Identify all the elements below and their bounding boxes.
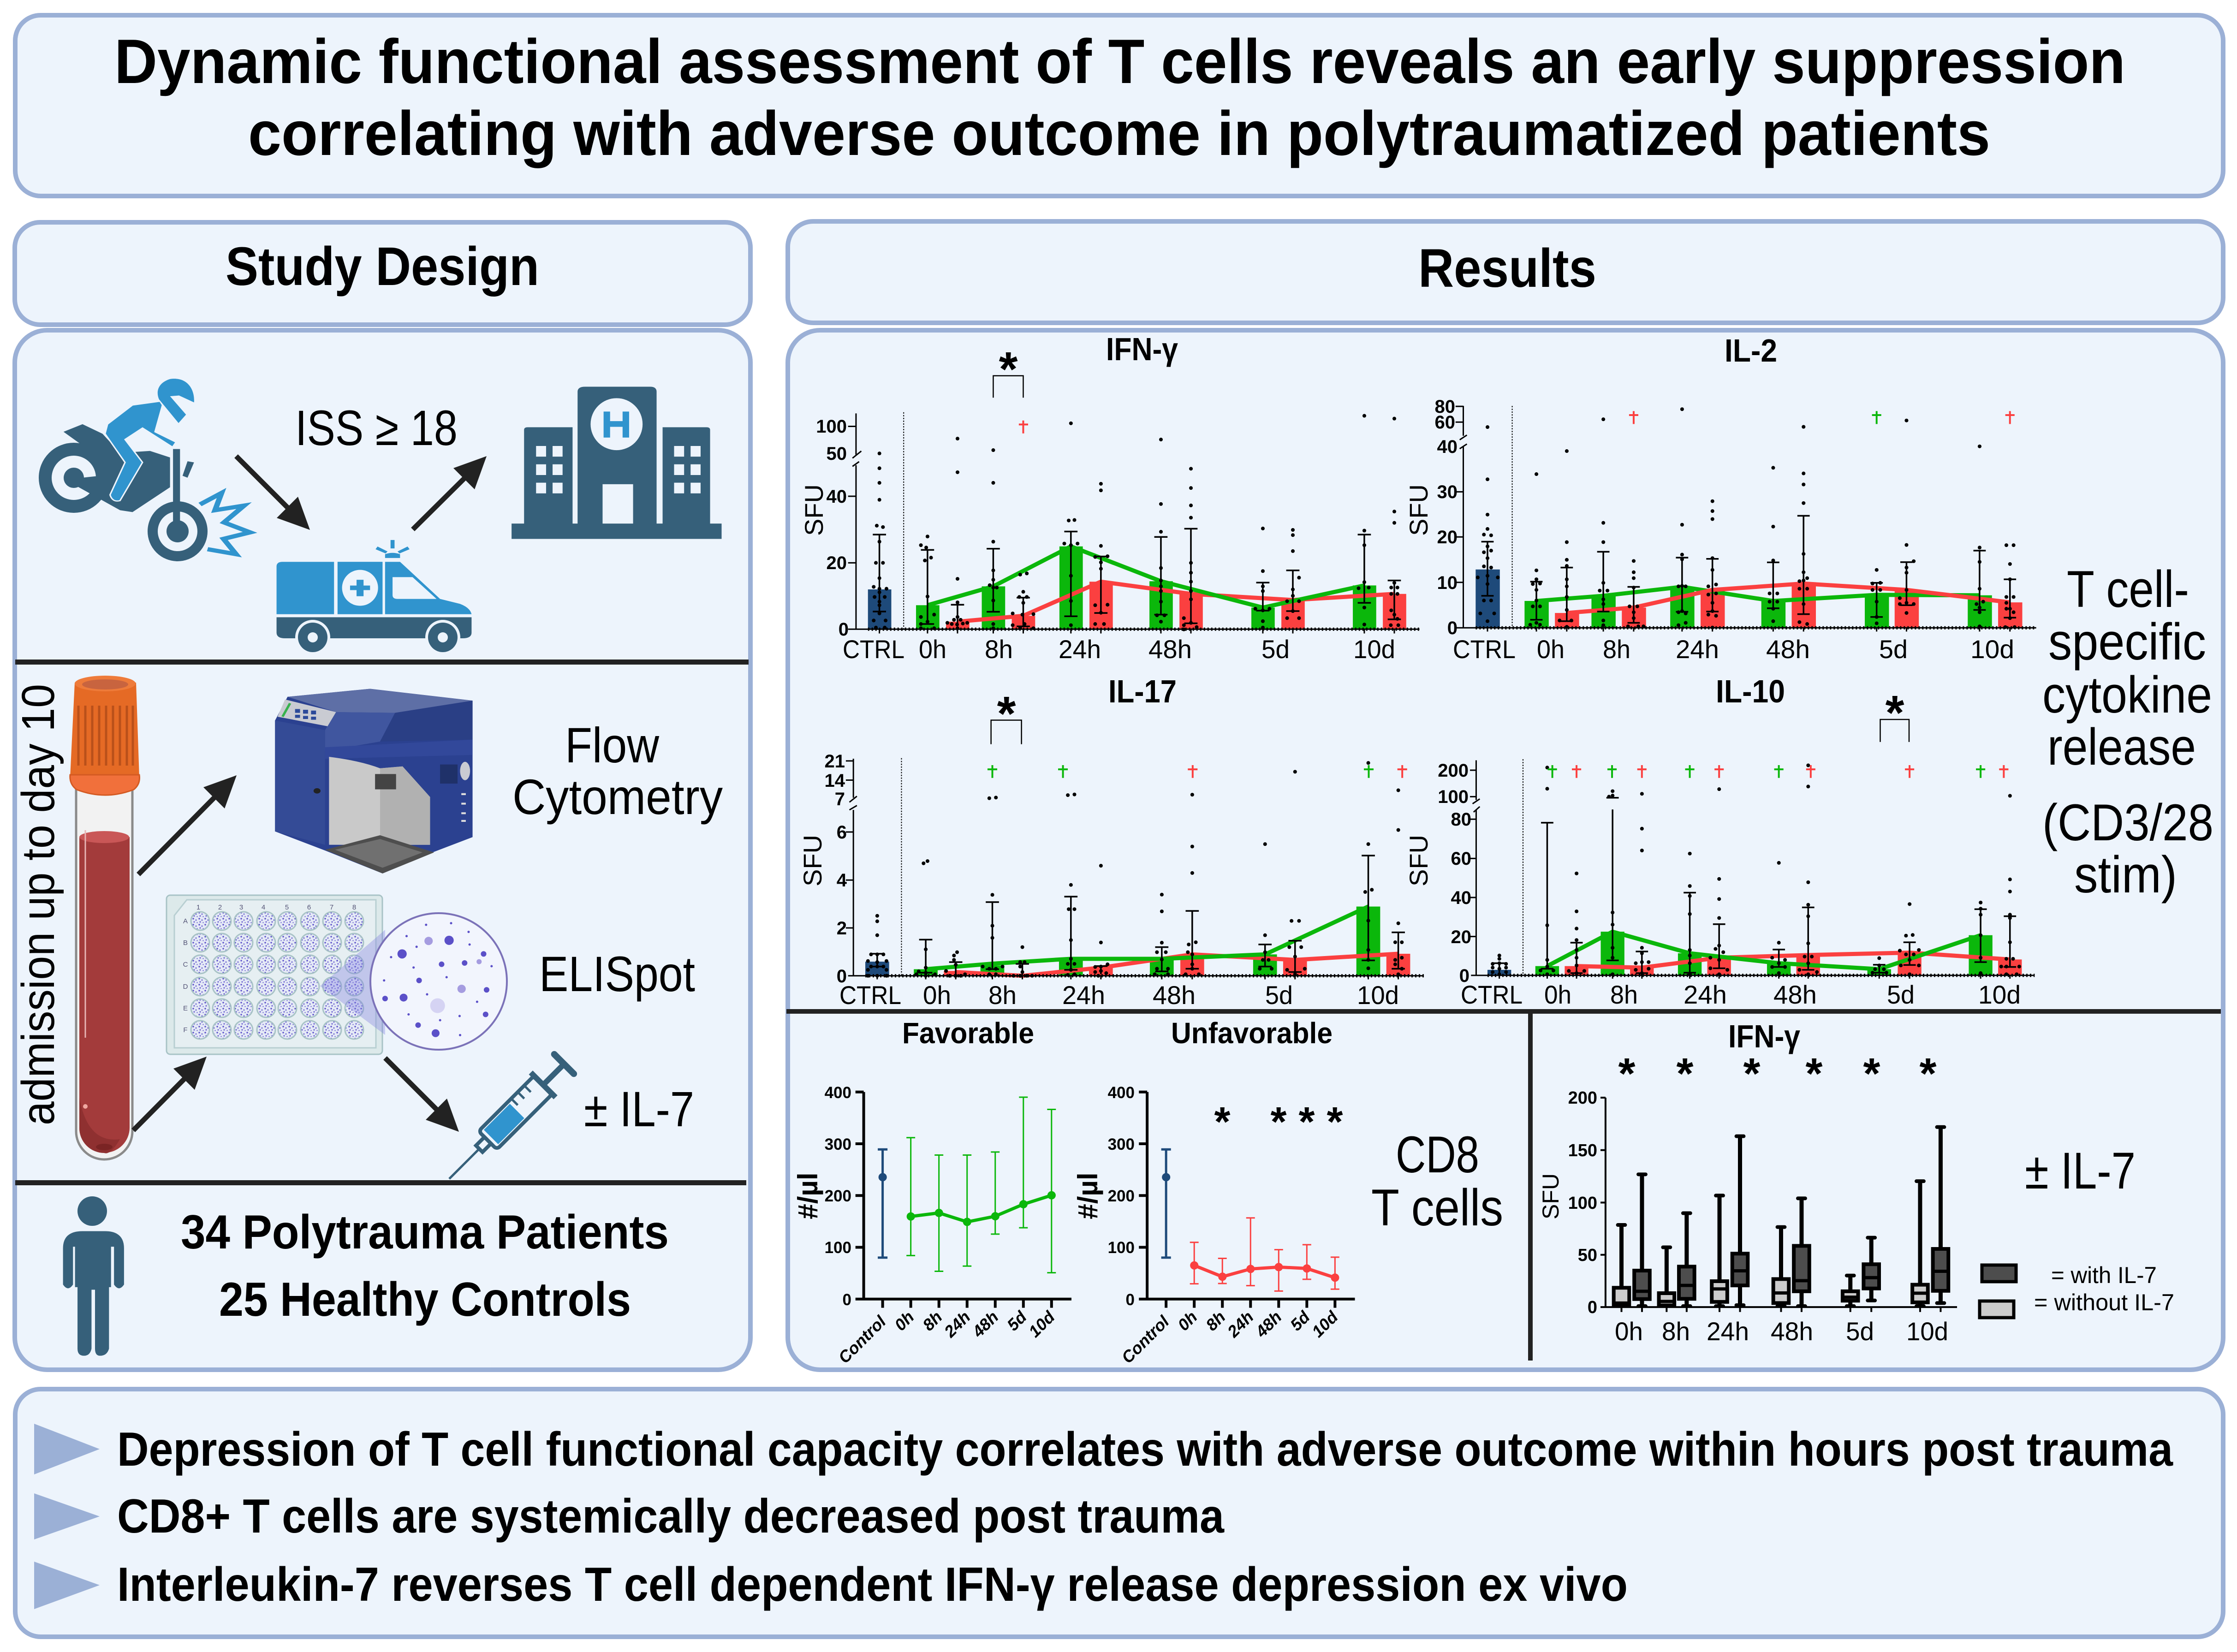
panel: title bbox=[15, 15, 2223, 196]
x axis labels: 5d bbox=[1846, 1317, 1874, 1346]
y axis tick labels bbox=[1568, 1088, 1597, 1317]
y axis tick labels: 400 bbox=[825, 1084, 851, 1102]
y axis tick labels: 40 bbox=[827, 487, 847, 507]
y axis tick labels bbox=[825, 1084, 851, 1309]
y axis tick labels bbox=[825, 751, 847, 986]
text: cytokine release side label bbox=[2042, 560, 2213, 903]
y axis tick labels: 50 bbox=[1578, 1246, 1597, 1265]
x axis labels: 5d bbox=[1887, 980, 1915, 1009]
x axis labels: 0h bbox=[891, 1307, 918, 1334]
icon: ELISpot well plate: 1 bbox=[196, 903, 200, 911]
conclusion text: CD8+ T cells are systemically decreased post trauma bbox=[117, 1490, 1225, 1543]
x axis labels bbox=[1453, 635, 2014, 664]
chart: IFN-gamma box plots with and without IL-7 bbox=[1538, 1018, 1957, 1346]
x axis labels: 8h bbox=[1662, 1317, 1690, 1346]
x axis labels: 48h bbox=[1771, 1317, 1813, 1346]
icon: ELISpot well plate: C bbox=[183, 961, 188, 969]
text: cohort sizes bbox=[181, 1206, 669, 1326]
significance asterisk: * bbox=[999, 342, 1018, 396]
text: cytokine release side label: release bbox=[2047, 718, 2196, 776]
x axis labels: 10d bbox=[1308, 1307, 1342, 1341]
icon: ELISpot well plate: 5 bbox=[285, 903, 289, 911]
y axis tick labels: 0 bbox=[837, 966, 847, 986]
x axis labels: 8h bbox=[1202, 1307, 1229, 1334]
x axis labels: 10d bbox=[1357, 981, 1399, 1010]
x axis labels: 5d bbox=[1286, 1307, 1314, 1334]
icon: ELISpot well plate: 6 bbox=[307, 903, 311, 911]
y axis tick labels: 80 bbox=[1434, 397, 1455, 417]
x axis labels: 48h bbox=[1148, 635, 1192, 664]
x axis labels: 0h bbox=[923, 981, 951, 1010]
plot: points, line and error bars bbox=[1139, 1092, 1355, 1308]
x axis labels: Control bbox=[834, 1312, 890, 1367]
arrow: plate to syringe bbox=[385, 1058, 459, 1132]
conclusion text bbox=[117, 1423, 2173, 1611]
x axis labels bbox=[834, 1307, 1059, 1367]
chart title: Favorable bbox=[902, 1016, 1034, 1050]
y axis tick labels: 100 bbox=[1568, 1194, 1597, 1213]
text: cytokine release side label: stim) bbox=[2074, 846, 2177, 903]
significance asterisks: * bbox=[1743, 1049, 1761, 1098]
y axis tick labels: 100 bbox=[1438, 787, 1469, 807]
chart: CD8 T cells favorable bbox=[792, 1016, 1071, 1367]
text: injury severity score: ISS ≥ 18 bbox=[295, 400, 458, 456]
y axis tick labels: 150 bbox=[1568, 1141, 1597, 1160]
y axis tick labels: 2 bbox=[837, 918, 847, 939]
panel: key conclusions bbox=[15, 1389, 2223, 1637]
y axis tick labels bbox=[816, 416, 849, 640]
significance asterisk: * bbox=[997, 687, 1016, 741]
icon: motorcycle crash bbox=[45, 379, 250, 556]
icon: syringe bbox=[437, 1052, 577, 1191]
x axis labels: 0h bbox=[1537, 635, 1565, 664]
y axis tick labels: 0 bbox=[1447, 618, 1458, 638]
arrow: tube to flow cytometer bbox=[138, 775, 237, 874]
chart: IL-2 cytokine release bbox=[1404, 333, 2036, 664]
text: cohort sizes: 34 Polytrauma Patients bbox=[181, 1206, 669, 1259]
icon: hospital bbox=[512, 386, 722, 539]
x axis labels: 0h bbox=[1174, 1307, 1201, 1334]
y axis tick labels bbox=[1438, 761, 1471, 986]
y axis tick labels: 0 bbox=[1459, 966, 1470, 986]
x axis labels: 48h bbox=[1773, 980, 1817, 1009]
x axis labels: 48h bbox=[1153, 981, 1196, 1010]
x axis labels: 24h bbox=[1684, 980, 1727, 1009]
heading: results: Results bbox=[1418, 238, 1596, 299]
arrow: ambulance to hospital bbox=[413, 456, 487, 529]
text: CD8 T cells side label: CD8 bbox=[1396, 1126, 1479, 1183]
chart title: Unfavorable bbox=[1171, 1016, 1333, 1050]
chart: IFN-gamma cytokine release bbox=[799, 331, 1420, 664]
y axis tick labels: 10 bbox=[1437, 573, 1458, 593]
y axis tick labels: 20 bbox=[1451, 927, 1471, 947]
x axis labels: CTRL bbox=[1453, 635, 1516, 664]
x axis labels bbox=[1461, 980, 2021, 1009]
y axis tick labels: 300 bbox=[1108, 1135, 1135, 1153]
y axis tick labels: 50 bbox=[827, 444, 847, 464]
plot: box and whisker marks bbox=[1600, 1098, 1957, 1312]
icon: magnified well with spots bbox=[320, 913, 507, 1050]
significance asterisks: * bbox=[1677, 1049, 1694, 1098]
text: CD8 T cells side label bbox=[1371, 1126, 1503, 1236]
chart: IL-10 cytokine release bbox=[1404, 673, 2035, 1009]
icon: ELISpot well plate: F bbox=[183, 1026, 188, 1034]
y axis tick labels: 200 bbox=[1108, 1187, 1135, 1205]
text: flow cytometry: Cytometry bbox=[512, 769, 723, 825]
x axis labels: 10d bbox=[1353, 635, 1395, 664]
y axis tick labels: 200 bbox=[825, 1187, 851, 1205]
chart: CD8 T cells unfavorable bbox=[1072, 1016, 1355, 1367]
x axis labels bbox=[843, 635, 1395, 664]
y axis tick labels: 0 bbox=[843, 1291, 851, 1309]
significance asterisks bbox=[1214, 1099, 1343, 1145]
y axis tick labels: 0 bbox=[839, 619, 849, 640]
y axis tick labels: 40 bbox=[1451, 888, 1471, 908]
y axis tick labels: 21 bbox=[825, 751, 845, 772]
x axis labels: CTRL bbox=[843, 635, 904, 664]
x axis labels: 24h bbox=[1707, 1317, 1749, 1346]
y axis label: SFU bbox=[799, 484, 828, 536]
chart: IL-17 cytokine release bbox=[798, 673, 1424, 1010]
x axis labels: 10d bbox=[1906, 1317, 1948, 1346]
x axis labels: 24h bbox=[1059, 635, 1101, 664]
y axis label: SFU bbox=[1538, 1173, 1564, 1219]
plot: bars, lines, error bars and dots bbox=[1456, 406, 2036, 631]
x axis labels: 8h bbox=[1603, 635, 1630, 664]
y axis tick labels: 300 bbox=[825, 1135, 851, 1153]
y axis label: SFU bbox=[1404, 835, 1433, 886]
legend: with and without IL-7 bbox=[1980, 1262, 2174, 1318]
x axis labels: 5d bbox=[1879, 635, 1908, 664]
x axis labels: 10d bbox=[1025, 1307, 1059, 1341]
heading: study design: Study Design bbox=[226, 236, 539, 297]
text: cytokine release side label: cytokine bbox=[2042, 666, 2212, 724]
plot: points, line and error bars bbox=[856, 1092, 1071, 1308]
y axis tick labels: 30 bbox=[1437, 482, 1458, 502]
x axis labels bbox=[1615, 1317, 1948, 1346]
text: cohort sizes: 25 Healthy Controls bbox=[219, 1273, 631, 1326]
y axis tick labels: 7 bbox=[835, 789, 845, 809]
icon: ELISpot well plate: A bbox=[183, 917, 188, 925]
y axis tick labels: 100 bbox=[1108, 1239, 1135, 1257]
x axis labels: 8h bbox=[988, 981, 1017, 1010]
y axis tick labels: 100 bbox=[816, 416, 847, 437]
x axis labels: 10d bbox=[1970, 635, 2014, 664]
significance asterisks: * bbox=[1327, 1099, 1343, 1145]
x axis labels: 24h bbox=[1223, 1307, 1257, 1341]
panel: results header bbox=[788, 221, 2223, 323]
icon: ELISpot well plate: D bbox=[183, 983, 188, 991]
text: cytokine release side label: (CD3/28 bbox=[2042, 794, 2213, 851]
x axis labels: 24h bbox=[1676, 635, 1719, 664]
text: IL-7 side label: ± IL-7 bbox=[2025, 1142, 2136, 1200]
icon: blood collection tube bbox=[70, 676, 139, 1159]
y axis tick labels: 60 bbox=[1434, 412, 1455, 433]
text: cytokine release side label: T cell- bbox=[2067, 560, 2189, 618]
icon: ELISpot well plate: B bbox=[183, 939, 188, 947]
y axis tick labels: 200 bbox=[1568, 1088, 1597, 1108]
y axis tick labels: 200 bbox=[1438, 761, 1469, 781]
plot: bars, lines, error bars and dots bbox=[848, 376, 1420, 633]
x axis labels: 0h bbox=[919, 635, 946, 664]
significance asterisks: * bbox=[1298, 1099, 1315, 1145]
x axis labels: 48h bbox=[968, 1307, 1002, 1341]
x axis labels: 10d bbox=[1978, 980, 2021, 1009]
bullet triangles bbox=[34, 1424, 100, 1609]
x axis labels: CTRL bbox=[1461, 980, 1523, 1009]
significance asterisks bbox=[1618, 1049, 1937, 1098]
significance asterisks: * bbox=[1214, 1099, 1231, 1145]
y axis tick labels: 14 bbox=[825, 771, 845, 791]
icon: flow cytometer bbox=[275, 689, 473, 874]
y axis tick labels: 400 bbox=[1108, 1084, 1135, 1102]
plot: bars, lines, error bars and dots bbox=[1470, 719, 2035, 979]
legend: with and without IL-7: = with IL-7 bbox=[2051, 1262, 2157, 1288]
panel: results content bbox=[786, 330, 2223, 1370]
x axis labels: 0h bbox=[1615, 1317, 1643, 1346]
icon: ELISpot well plate: 2 bbox=[218, 903, 222, 911]
text: sampling period (rotated): admission up to day 10 bbox=[12, 684, 64, 1125]
y axis tick labels: 0 bbox=[1588, 1298, 1597, 1317]
y axis tick labels: 80 bbox=[1451, 809, 1471, 830]
plot: bars, lines, error bars and dots bbox=[846, 720, 1424, 979]
arrow: crash to ambulance bbox=[236, 456, 310, 530]
icon: ELISpot well plate bbox=[167, 895, 382, 1054]
text: plus minus IL-7: ± IL-7 bbox=[584, 1081, 694, 1137]
x axis labels bbox=[1118, 1307, 1342, 1367]
y axis tick labels: 6 bbox=[837, 822, 847, 843]
x axis labels: Control bbox=[1118, 1312, 1173, 1367]
significance asterisks: * bbox=[1920, 1049, 1937, 1098]
x axis labels bbox=[839, 981, 1399, 1010]
y axis tick labels: 20 bbox=[1437, 527, 1458, 547]
x axis labels: 5d bbox=[1003, 1307, 1030, 1334]
icon: ELISpot well plate: 3 bbox=[239, 903, 243, 911]
y axis tick labels: 20 bbox=[827, 553, 847, 573]
text: CD8 T cells side label: T cells bbox=[1371, 1179, 1503, 1236]
significance asterisks: * bbox=[1863, 1049, 1880, 1098]
significance asterisks: * bbox=[1618, 1049, 1636, 1098]
text: ELISpot: ELISpot bbox=[539, 946, 695, 1002]
x axis labels: CTRL bbox=[839, 981, 901, 1010]
x axis labels: 8h bbox=[919, 1307, 946, 1334]
title line 1: Dynamic functional assessment of T cells reveals an early suppression bbox=[114, 26, 2125, 96]
y axis tick labels: 100 bbox=[825, 1239, 851, 1257]
conclusion text: Interleukin-7 reverses T cell dependent IFN-γ release depression ex vivo bbox=[117, 1558, 1628, 1611]
icon: ELISpot well plate: 4 bbox=[262, 903, 265, 911]
panel: study design content bbox=[12, 330, 750, 1370]
text: flow cytometry: Flow bbox=[565, 717, 660, 773]
x axis labels: 5d bbox=[1261, 635, 1290, 664]
x axis labels: 0h bbox=[1544, 980, 1571, 1009]
significance asterisk: * bbox=[1886, 686, 1904, 740]
text: flow cytometry bbox=[512, 717, 723, 825]
y axis tick labels bbox=[1434, 397, 1458, 638]
icon: ELISpot well plate: 7 bbox=[330, 903, 333, 911]
icon: ELISpot well plate: E bbox=[183, 1004, 188, 1012]
y axis label: SFU bbox=[798, 835, 827, 886]
x axis labels: 48h bbox=[1251, 1307, 1285, 1341]
chart title: IL-2 bbox=[1725, 333, 1777, 368]
x axis labels: 8h bbox=[985, 635, 1013, 664]
text: cytokine release side label: specific bbox=[2048, 613, 2206, 671]
y axis label: #/µl bbox=[1072, 1172, 1103, 1219]
title line 2: correlating with adverse outcome in polytraumatized patients bbox=[248, 98, 1990, 168]
chart title: IL-17 bbox=[1108, 673, 1177, 709]
x axis labels: 24h bbox=[1062, 981, 1105, 1010]
y axis label: #/µl bbox=[792, 1172, 823, 1219]
panel: study design header bbox=[15, 222, 750, 325]
icon: person bbox=[63, 1196, 124, 1356]
y axis tick labels bbox=[1108, 1084, 1135, 1309]
x axis labels: 24h bbox=[940, 1307, 974, 1341]
x axis labels: 48h bbox=[1766, 635, 1810, 664]
legend: with and without IL-7: = without IL-7 bbox=[2034, 1290, 2174, 1315]
y axis tick labels: 4 bbox=[837, 870, 847, 891]
x axis labels: 8h bbox=[1610, 980, 1638, 1009]
arrow: tube to ELISpot plate bbox=[133, 1057, 207, 1130]
y axis tick labels: 40 bbox=[1437, 437, 1458, 457]
chart title: IL-10 bbox=[1716, 673, 1785, 709]
chart title: IFN-γ bbox=[1728, 1018, 1800, 1054]
y axis label: SFU bbox=[1404, 484, 1433, 536]
icon: ELISpot well plate: 8 bbox=[352, 903, 356, 911]
chart title: IFN-γ bbox=[1106, 331, 1178, 367]
x axis labels: 5d bbox=[1265, 981, 1293, 1010]
icon: ambulance bbox=[277, 540, 471, 655]
y axis tick labels: 60 bbox=[1451, 849, 1471, 869]
significance asterisks: * bbox=[1270, 1099, 1287, 1145]
significance asterisks: * bbox=[1806, 1049, 1823, 1098]
y axis tick labels: 0 bbox=[1126, 1291, 1135, 1309]
